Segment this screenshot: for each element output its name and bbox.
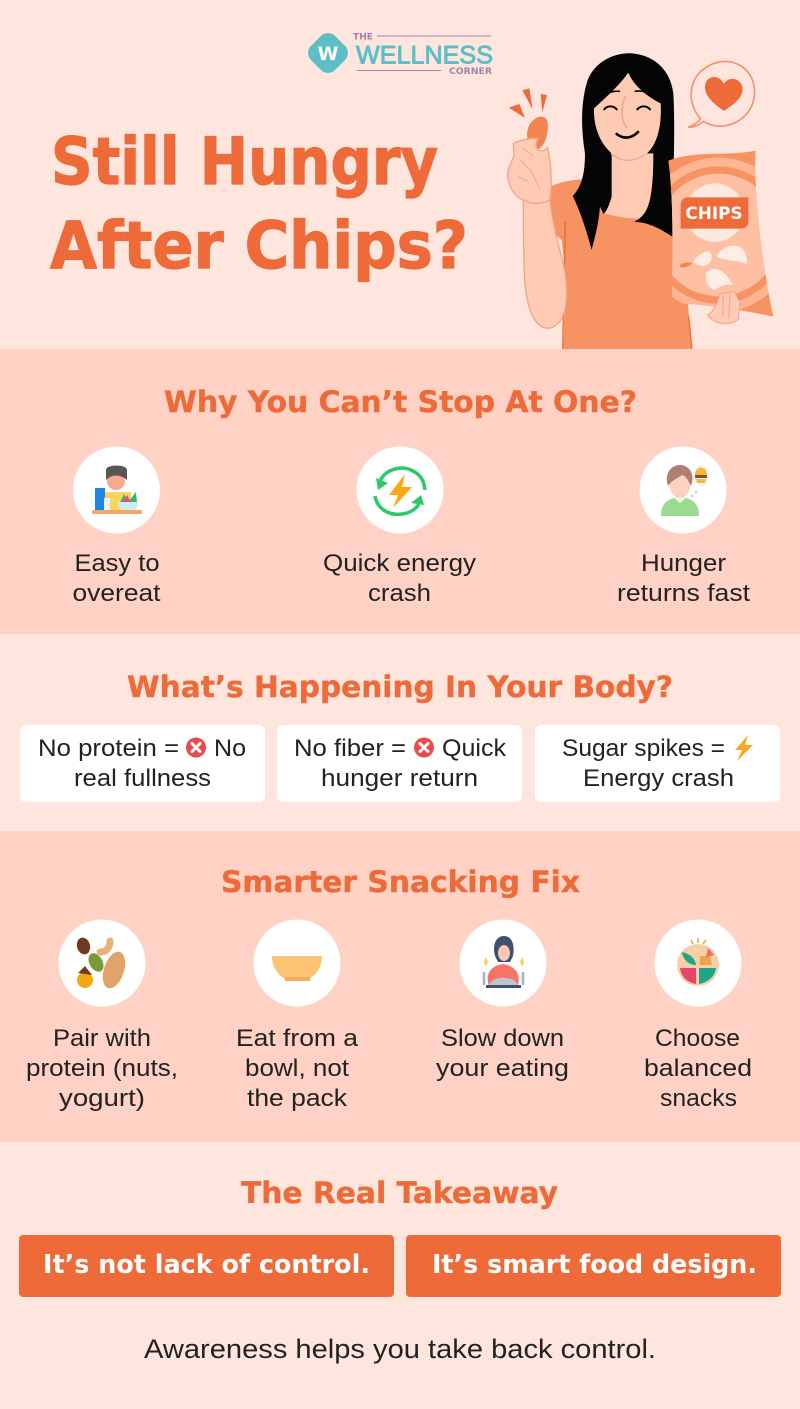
item: slow down your eating [436, 920, 569, 1082]
label: Hunger [641, 550, 726, 577]
item: slow down your eating: your eating [436, 1055, 569, 1082]
item: pair with protein: yogurt) [59, 1085, 145, 1112]
hand [508, 138, 551, 203]
icon: snack plate [677, 938, 719, 986]
icon: person with salad [92, 466, 142, 514]
card: no fiber: hunger return [321, 765, 478, 792]
logo: The Wellness Corner: W [318, 43, 339, 65]
card: sugar spikes: Sugar spikes = [562, 735, 725, 762]
item: quick energy crash: crash [368, 580, 431, 607]
facial features [603, 91, 652, 138]
chips bag [668, 150, 774, 316]
card: no fiber: No fiber = [294, 735, 406, 762]
section band: why you can't stop at one [0, 349, 800, 634]
section band: smarter snacking fix [0, 831, 800, 1142]
closing line: Awareness helps you take back control. [144, 1334, 656, 1364]
label: Choose [655, 1025, 740, 1052]
heading: what's happening in your body: What’s Happening In Your Body? [127, 670, 673, 704]
title: Still Hungry [51, 125, 438, 200]
button: not lack of control [19, 1235, 394, 1297]
label: Eat from a [236, 1025, 359, 1052]
hand holding bag [707, 292, 740, 324]
icon: red cross [186, 738, 206, 758]
item: quick energy crash [323, 446, 476, 607]
item: eat from a bowl: the pack [247, 1085, 348, 1112]
chips bag: CHIPS [685, 204, 743, 223]
icon: hungry person thinking of burger [661, 465, 709, 516]
speech bubble with heart [688, 61, 755, 127]
t-shirt [550, 179, 693, 350]
item: choose balanced snacks: balanced [644, 1055, 752, 1082]
logo: The Wellness Corner [304, 29, 493, 77]
icon: woman with covered dish [484, 936, 524, 988]
card: no fiber: Quick [442, 735, 507, 762]
card: no fiber [277, 725, 522, 802]
icon: bowl [272, 956, 322, 981]
title [50, 125, 468, 284]
heading: smarter snacking fix: Smarter Snacking Fix [221, 865, 580, 899]
label: Slow down [441, 1025, 564, 1052]
label: Easy to [74, 550, 160, 577]
label: Pair with [53, 1025, 151, 1052]
heading: why you can't stop at one: Why You Can’t Stop At One? [164, 385, 637, 419]
button: smart food design [406, 1235, 781, 1297]
item: choose balanced snacks [644, 920, 752, 1112]
card: sugar spikes [535, 725, 780, 802]
item: easy to overeat [72, 446, 161, 607]
title: After Chips? [50, 209, 468, 284]
item: eat from a bowl: bowl, not [245, 1055, 349, 1082]
label: Quick energy [323, 550, 476, 577]
logo: The Wellness Corner: CORNER [449, 67, 492, 77]
button: not lack of control: It’s not lack of control. [43, 1250, 370, 1280]
card: sugar spikes: Energy crash [583, 765, 734, 792]
item: choose balanced snacks: snacks [660, 1085, 737, 1112]
icon: nuts [75, 936, 129, 991]
illustration: woman holding chips bag [508, 53, 796, 350]
icon: lightning bolt [735, 735, 753, 761]
raised arm [523, 197, 567, 328]
hair [573, 53, 674, 250]
item: pair with protein: protein (nuts, [26, 1055, 178, 1082]
icon: energy bolt with arrows [375, 468, 425, 514]
neck and chest [602, 147, 663, 219]
icon: red cross [414, 738, 434, 758]
card: no protein: real fullness [74, 765, 211, 792]
chip in hand with sparks [509, 88, 548, 149]
card: no protein: No protein = [38, 735, 179, 762]
logo: The Wellness Corner: THE [353, 32, 373, 42]
card: no protein: No [214, 735, 246, 762]
item: hunger returns fast [617, 446, 750, 607]
logo: The Wellness Corner: WELLNESS [356, 42, 493, 70]
item: pair with protein [26, 920, 178, 1112]
face [594, 73, 661, 160]
item: hunger returns fast: returns fast [617, 580, 750, 607]
item: easy to overeat: overeat [72, 580, 161, 607]
item: eat from a bowl [236, 920, 359, 1112]
heading: the real takeaway: The Real Takeaway [241, 1176, 558, 1210]
button: smart food design: It’s smart food design. [432, 1250, 757, 1280]
card: no protein [20, 725, 265, 802]
